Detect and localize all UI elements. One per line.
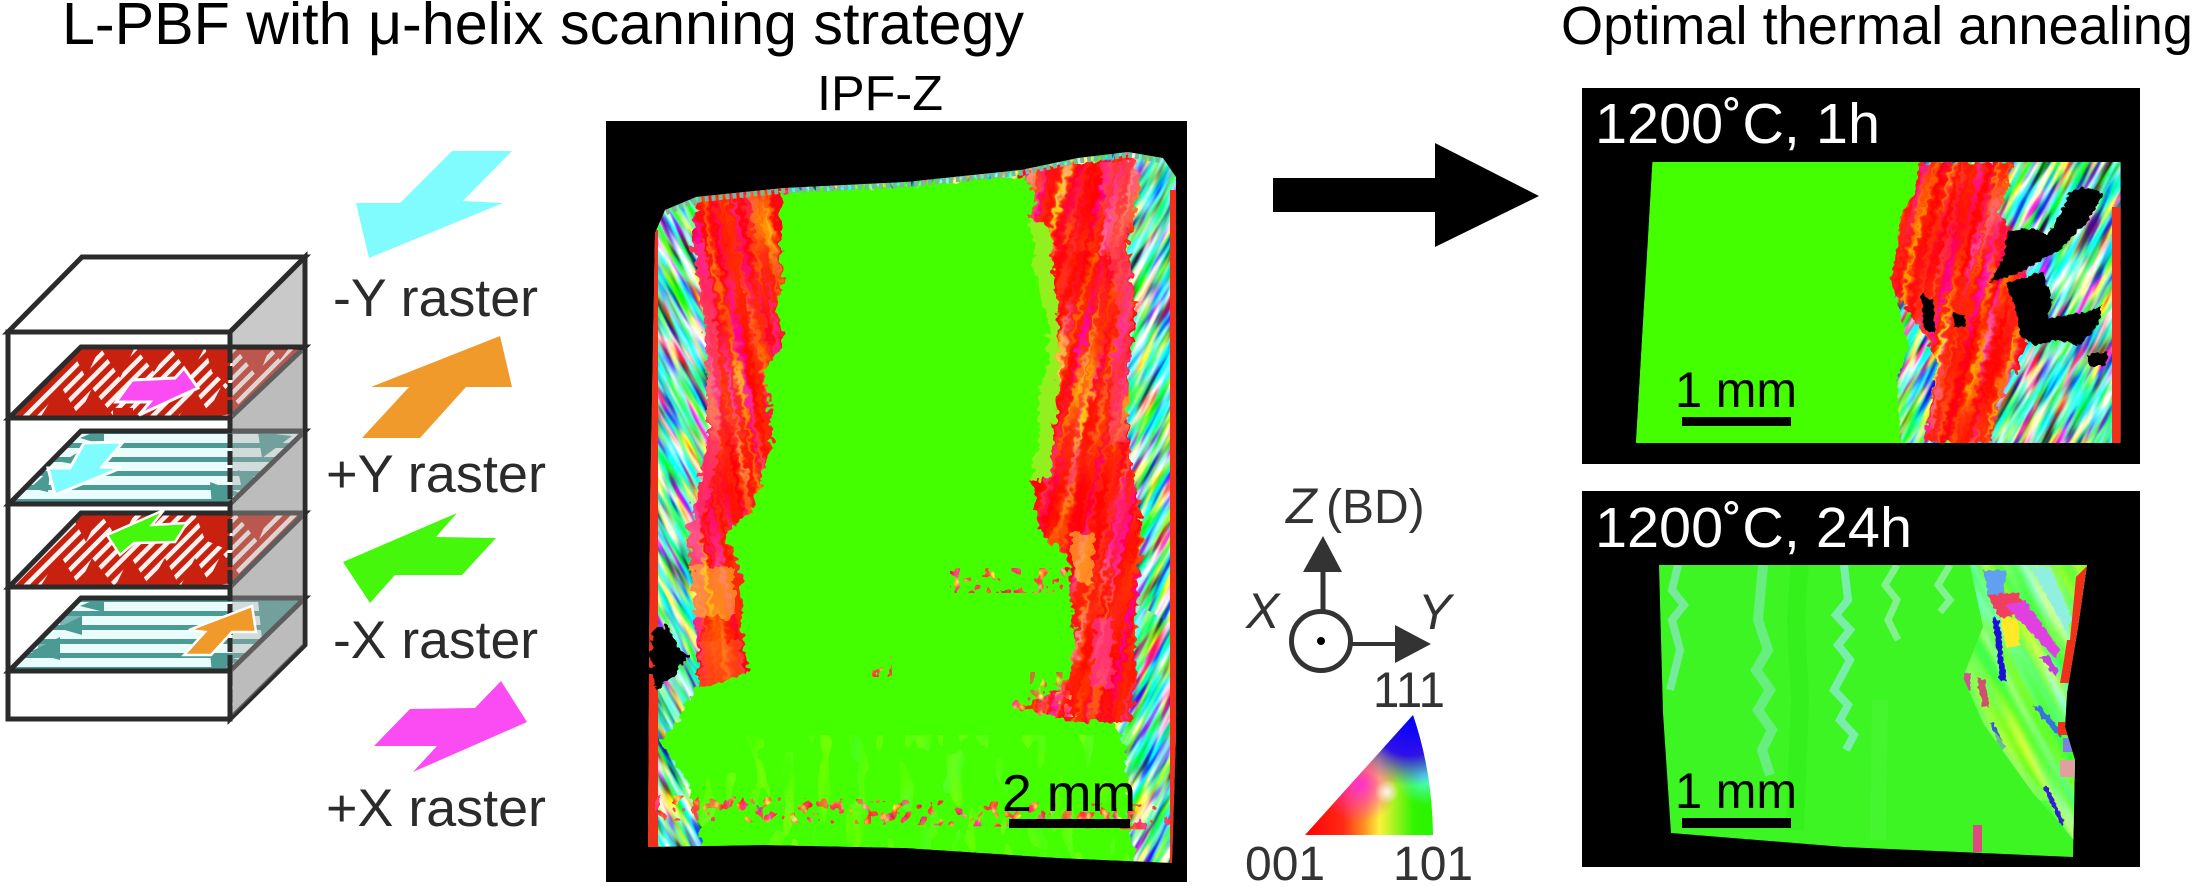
arrow: annealing direction xyxy=(1273,143,1539,247)
diagram: layered build box with raster layers xyxy=(0,257,310,719)
IPF colour key xyxy=(1305,662,1445,835)
label: Y: Y xyxy=(1418,584,1455,640)
scale label: 2 mm: 2 mm xyxy=(1002,765,1136,823)
box front-right edge xyxy=(228,332,232,719)
scale label: 1 mm: 1 mm xyxy=(1675,362,1797,418)
colour triangle xyxy=(1305,715,1433,835)
label: +Y raster: +Y raster xyxy=(326,445,546,504)
layer 3: red hatched raster with -X arrow xyxy=(0,508,310,593)
label: Z (BD): (BD) xyxy=(1326,481,1425,534)
panel: 1200˚C, 24h map xyxy=(1582,491,2140,867)
condition label: 1200˚C, 24h: 1200˚C, 24h xyxy=(1595,496,1912,560)
map: mostly green with red and mixed grains xyxy=(1630,150,2125,450)
axis X circle with dot xyxy=(1292,612,1350,670)
map: grain orientation texture xyxy=(640,140,1190,870)
arrow: -X raster xyxy=(343,513,496,603)
label: +X raster: +X raster xyxy=(326,779,546,838)
label: Z (BD): Z xyxy=(1285,478,1318,534)
panel: 1200˚C, 1h map xyxy=(1582,88,2140,464)
side face tint over layers xyxy=(232,350,303,716)
coordinate axes xyxy=(1245,478,1455,670)
panel: IPF-Z orientation map as built xyxy=(606,121,1190,882)
condition label: 1200˚C, 1h: 1200˚C, 1h xyxy=(1595,92,1880,156)
scale bar: 1 mm xyxy=(1682,417,1791,426)
axis Z arrow xyxy=(1303,536,1342,610)
layer 2: teal raster with -Y arrow xyxy=(0,428,310,506)
arrow: -Y raster xyxy=(356,151,512,258)
label: -Y raster: -Y raster xyxy=(333,269,538,328)
arrow: +X raster xyxy=(374,681,527,772)
raster direction legend xyxy=(326,151,546,838)
scale bar: 1 mm xyxy=(1682,818,1791,828)
layer 1: red hatched raster with +X arrow xyxy=(3,344,312,420)
layer 4: teal raster xyxy=(0,596,310,674)
layer 4 +Y arrow xyxy=(184,606,256,655)
scale bar: 2 mm xyxy=(1009,819,1130,828)
box front face xyxy=(8,332,230,719)
arrow: +Y raster xyxy=(362,336,512,438)
heading: IPF-Z: IPF-Z xyxy=(817,67,943,121)
box side face xyxy=(230,257,305,719)
label: X: X xyxy=(1245,583,1281,639)
scale label: 1 mm: 1 mm xyxy=(1675,763,1797,819)
label: -X raster: -X raster xyxy=(333,611,538,670)
label: 111: 111 xyxy=(1373,662,1445,718)
box top face xyxy=(8,257,305,332)
axis Y arrow xyxy=(1352,625,1431,663)
map: recrystallised green with mixed grains at right xyxy=(1650,560,2090,860)
